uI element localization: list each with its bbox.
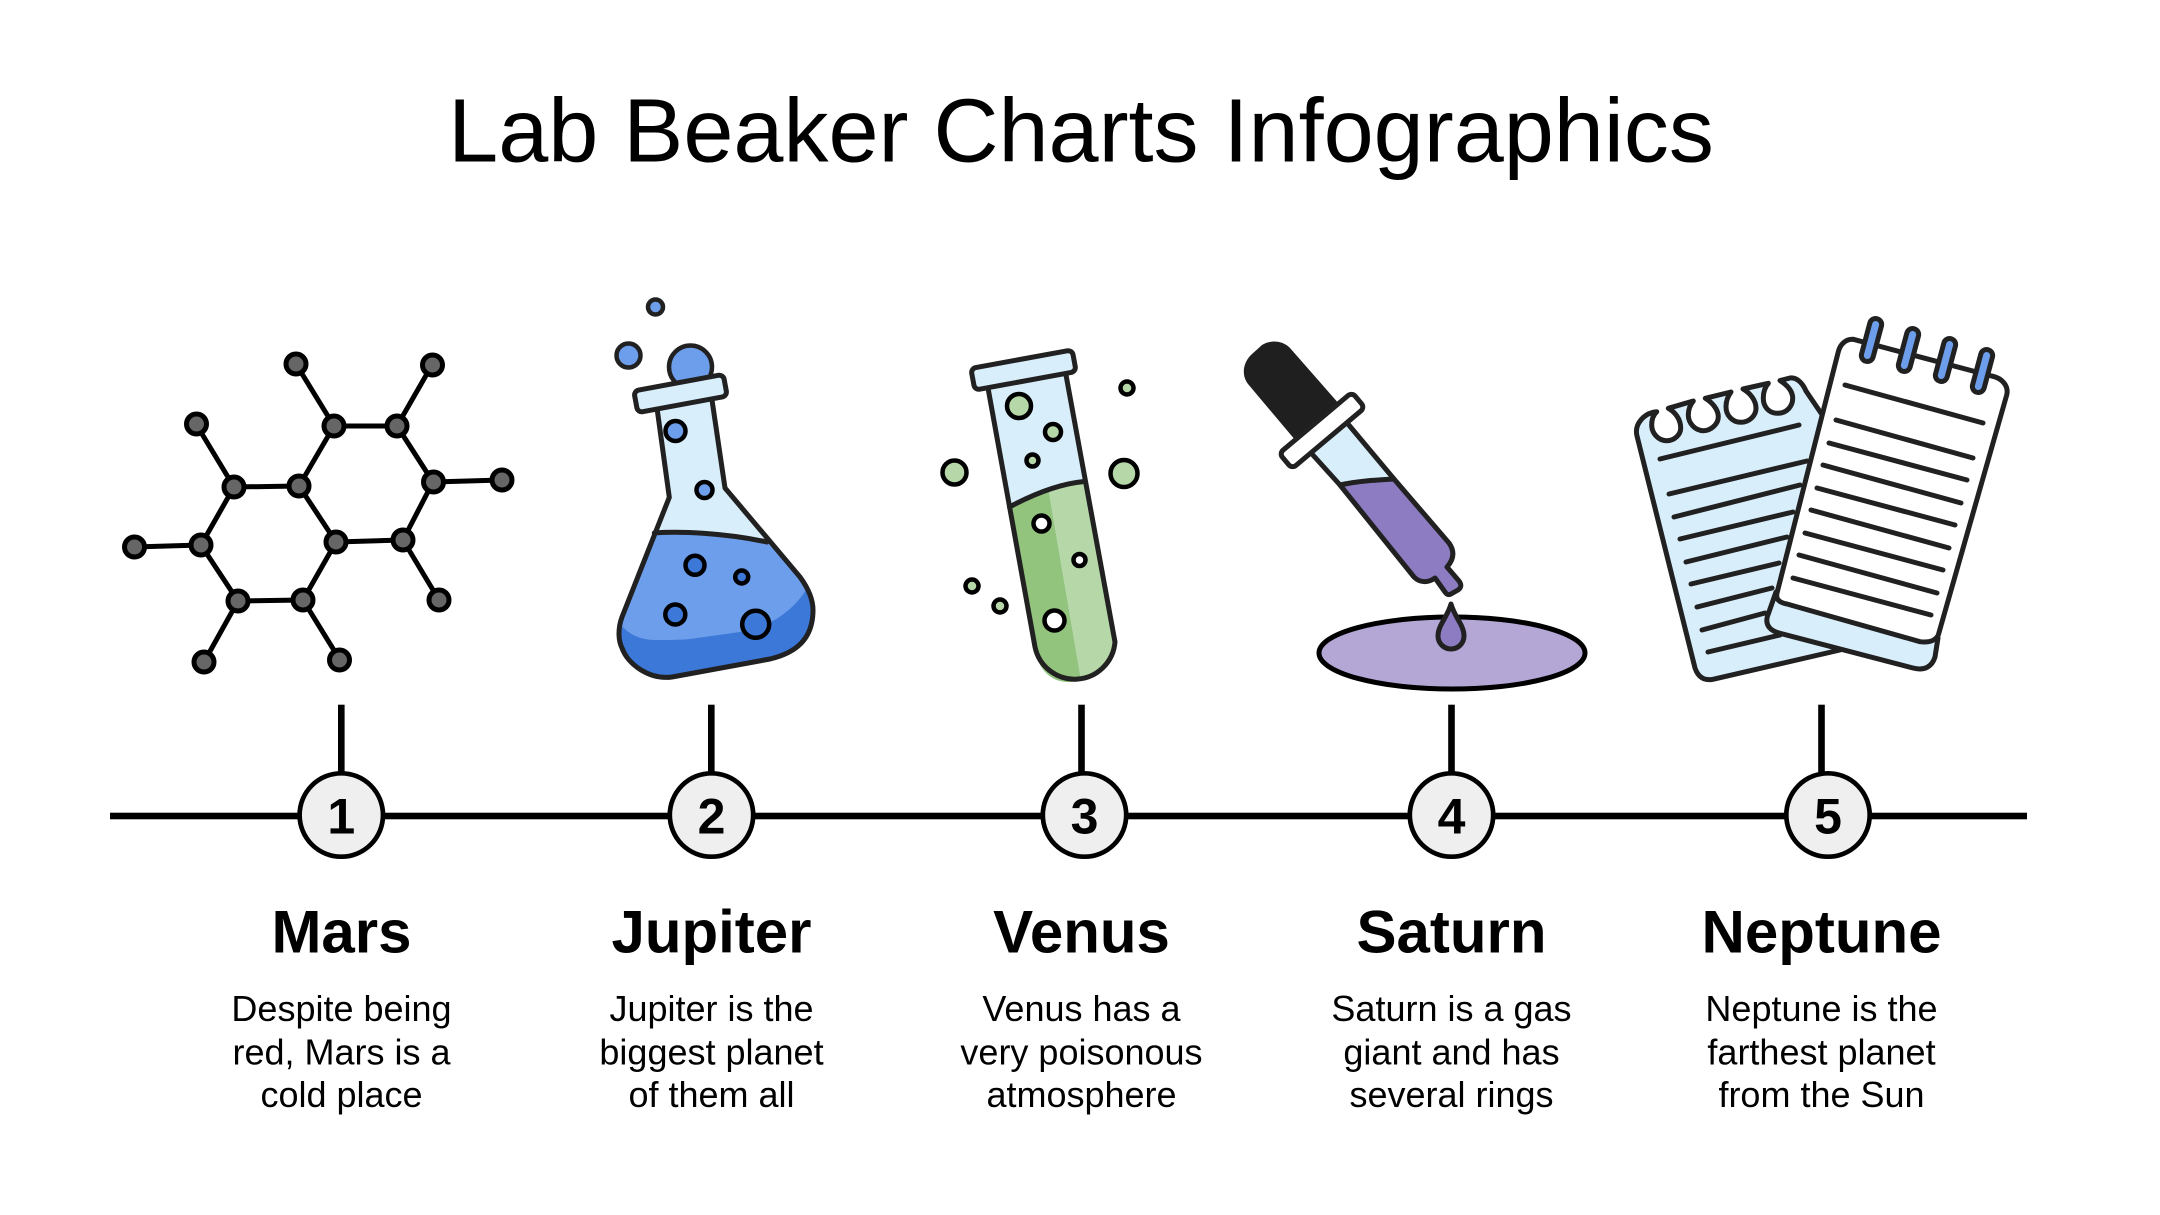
- description: Saturn: Saturn is a gas: [1331, 988, 1572, 1029]
- flask bubbles above: [616, 300, 712, 388]
- marker 5: [1786, 773, 1870, 857]
- marker 2: [670, 773, 753, 857]
- flask outline: [619, 400, 813, 677]
- description: Venus: very poisonous: [960, 1032, 1203, 1072]
- back notebook: [1636, 378, 1880, 680]
- drop: [1438, 604, 1464, 649]
- flask liquid shade: [619, 590, 813, 677]
- flask liquid: [619, 532, 813, 677]
- description: Neptune: farthest planet: [1707, 1032, 1936, 1072]
- description: Mars: cold place: [260, 1074, 423, 1115]
- description: Jupiter: Jupiter is the: [609, 988, 814, 1029]
- dropper collar: [1279, 392, 1365, 469]
- marker 4: [1410, 773, 1493, 857]
- icon: flask: [616, 300, 813, 677]
- icon: dropper and puddle: [1244, 342, 1585, 689]
- timeline: [110, 705, 2027, 857]
- tube outline: [988, 375, 1115, 679]
- description: Venus: Venus has a: [982, 988, 1182, 1029]
- flask liquid surface: [654, 532, 767, 542]
- marker 4: 4: [1438, 788, 1466, 844]
- icon: test tube: [942, 350, 1138, 682]
- heading: Saturn: Saturn: [1356, 898, 1547, 966]
- column: Mars: [231, 898, 452, 1115]
- front notebook page: [1777, 339, 2007, 642]
- marker 1: 1: [327, 788, 355, 844]
- back notebook lines: [1660, 425, 1807, 652]
- tube liquid light: [1048, 482, 1115, 680]
- description: Neptune: Neptune is the: [1705, 988, 1938, 1029]
- heading: Mars: Mars: [271, 898, 412, 966]
- column: Saturn: [1331, 898, 1572, 1115]
- marker 2: 2: [698, 788, 725, 844]
- description: Mars: Despite being: [231, 988, 452, 1029]
- marker 1: [300, 773, 383, 857]
- marker stems: [338, 705, 1825, 775]
- puddle: [1319, 617, 1585, 689]
- tube liquid dark: [1010, 490, 1081, 682]
- column: Jupiter: [599, 898, 824, 1115]
- description: Saturn: several rings: [1349, 1074, 1554, 1115]
- column: Venus: [960, 898, 1203, 1115]
- tube green bubbles: [942, 382, 1138, 612]
- flask inner bubbles: [665, 421, 769, 638]
- dropper liquid: [1340, 479, 1461, 595]
- icon: molecule: [124, 354, 512, 672]
- flask collar: [634, 374, 727, 413]
- front notebook back page: [1767, 592, 1938, 669]
- dropper bulb: [1244, 342, 1340, 441]
- timeline axis: [110, 813, 2027, 819]
- tube glass: [988, 375, 1115, 679]
- description: Jupiter: of them all: [628, 1074, 795, 1115]
- heading: Venus: Venus: [993, 898, 1170, 966]
- heading: Neptune: Neptune: [1702, 898, 1942, 966]
- description: Saturn: giant and has: [1343, 1032, 1560, 1072]
- tube white bubbles: [1034, 516, 1086, 630]
- description: Neptune: from the Sun: [1718, 1074, 1925, 1115]
- description: Jupiter: biggest planet: [599, 1032, 824, 1072]
- marker 3: 3: [1071, 788, 1098, 844]
- heading: Jupiter: Jupiter: [611, 898, 812, 966]
- front notebook lines: [1793, 385, 1983, 615]
- description: Venus: atmosphere: [986, 1074, 1177, 1115]
- dropper outline: [1312, 424, 1394, 485]
- tube collar: [971, 350, 1076, 390]
- marker 3: [1043, 773, 1126, 857]
- dropper glass: [1312, 424, 1394, 485]
- icon: notebooks: [1636, 317, 2007, 680]
- notebook spiral rings: [1860, 317, 1994, 394]
- marker 5: 5: [1814, 788, 1842, 844]
- flask glass: [654, 400, 767, 542]
- title: Lab Beaker Charts Infographics: [448, 82, 1714, 182]
- column: Neptune: [1702, 898, 1942, 1115]
- tube liquid surface: [1010, 482, 1084, 507]
- description: Mars: red, Mars is a: [232, 1032, 452, 1072]
